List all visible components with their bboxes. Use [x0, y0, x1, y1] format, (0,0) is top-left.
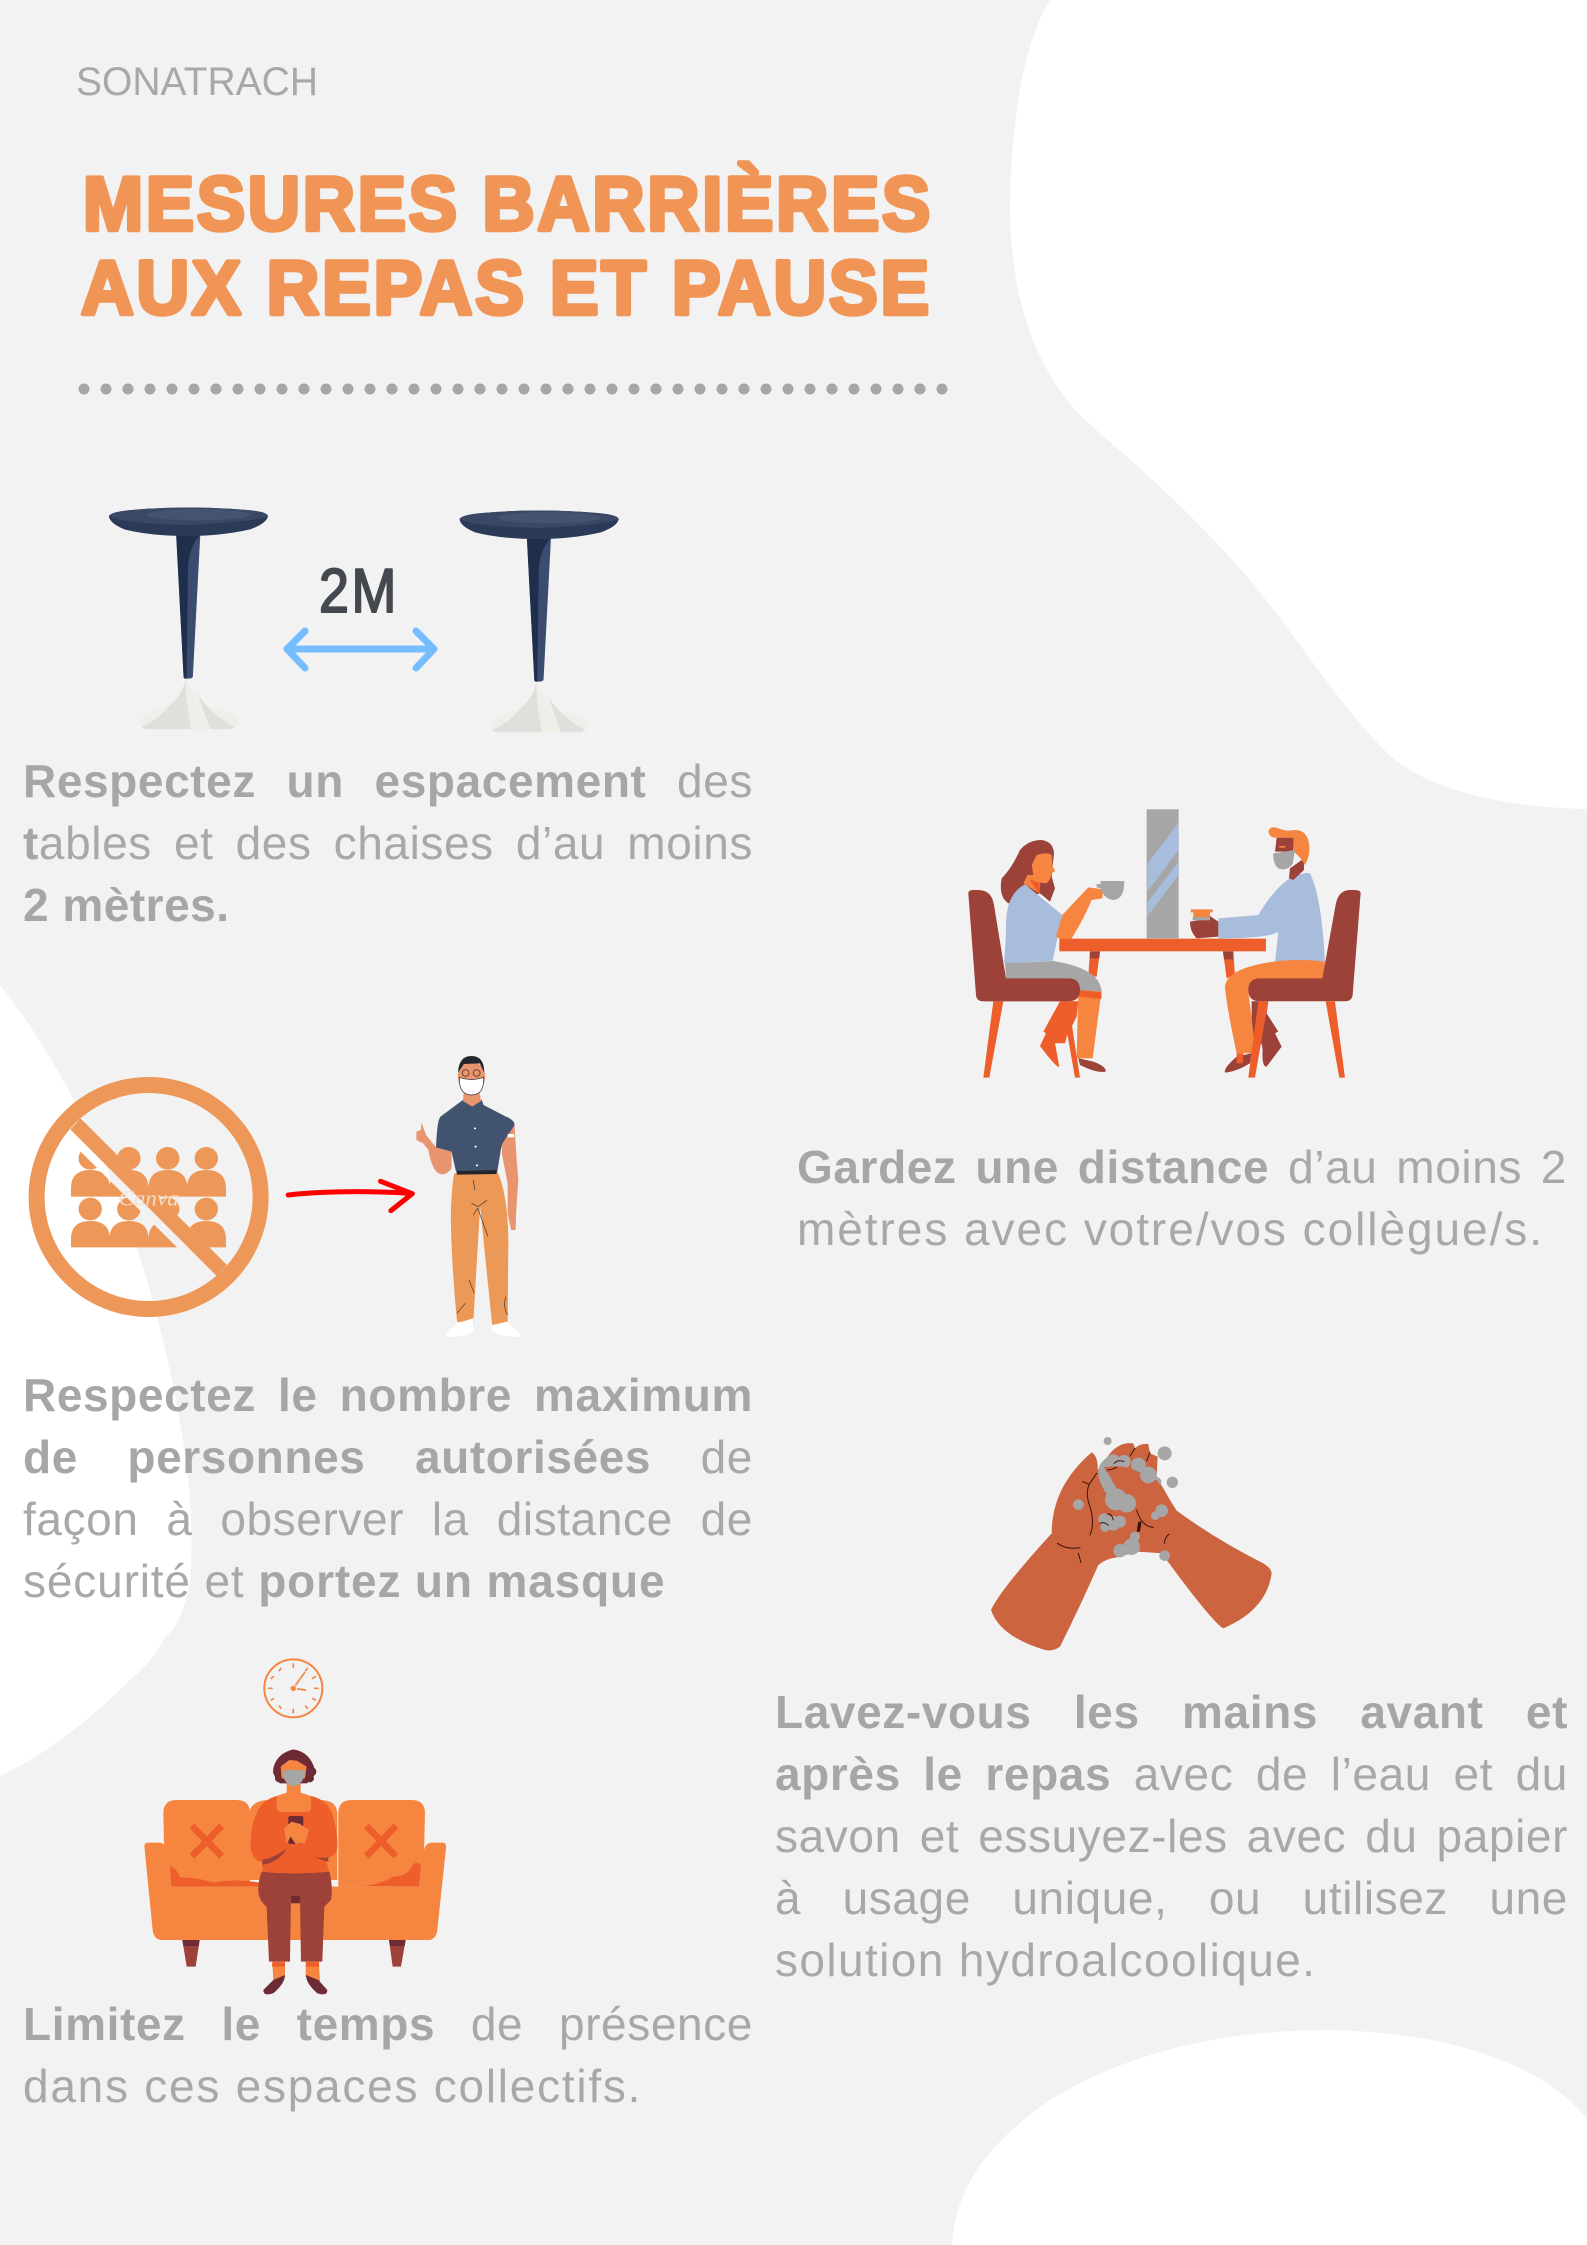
text block: maximum number of people: [23, 1369, 753, 1607]
upper hand fingers over foam: [1104, 1466, 1173, 1517]
illustration: two colleagues at a table with a screen: [968, 809, 1361, 1078]
text block: keep distance: mètres avec votre/vos collègue/s.: [797, 1203, 1544, 1255]
woman: [1001, 840, 1124, 1072]
illustration: sofa with woman seated: [144, 1749, 446, 1994]
distance label: 2M: [319, 557, 399, 626]
text block: wash hands: Lavez-vous les mains avant et: [775, 1686, 1568, 1738]
text block: maximum number of people: sécurité et portez un masque: [23, 1555, 665, 1607]
protective screen: [1147, 809, 1179, 938]
left chair back: [968, 890, 1068, 1001]
arrow: red hand-drawn arrow: [288, 1181, 412, 1211]
text block: keep distance: [797, 1141, 1567, 1255]
arms: [416, 1123, 518, 1230]
man: [1190, 827, 1325, 1073]
illustration: two tables two metres apart: [109, 507, 619, 732]
far table legs: [1088, 951, 1235, 978]
text block: wash hands: après le repas avec de l’eau et du: [775, 1748, 1568, 1800]
background blob: top right: [1010, 0, 1587, 809]
text block: limit time: dans ces espaces collectifs.: [23, 2060, 642, 2112]
illustration: man with mask, thumb up: [416, 1056, 522, 1337]
text block: wash hands: [775, 1686, 1568, 1986]
title: [81, 162, 933, 331]
shirt: [436, 1100, 515, 1172]
icon: wall clock: [264, 1659, 322, 1717]
text block: maximum number of people: façon à observer la distance de: [23, 1493, 753, 1545]
shoes: [446, 1318, 522, 1337]
title: MESURES BARRIÈRES: [83, 162, 933, 247]
hands: [991, 1443, 1272, 1650]
sofa base and arms: [144, 1843, 446, 1940]
trousers: [451, 1172, 508, 1325]
crowd of people: [71, 1147, 226, 1247]
background blob: left: [0, 985, 192, 1776]
text block: table spacing: 2 mètres.: [23, 879, 230, 931]
arrow: two metres double arrow: [287, 631, 434, 668]
organisation name: SONATRACH: [76, 60, 318, 104]
sofa legs: [182, 1940, 406, 1967]
left chair seat: [983, 978, 1080, 1001]
mask: [459, 1077, 484, 1095]
background blob: bottom right: [952, 2030, 1587, 2245]
neck and head: [463, 1090, 481, 1107]
icon: no crowd prohibition sign: [37, 1085, 261, 1309]
right chair legs: [1248, 1001, 1345, 1078]
left chair legs: [983, 1001, 1080, 1078]
text block: wash hands: savon et essuyez-les avec du papier: [775, 1810, 1568, 1862]
sofa back cushions: [250, 1800, 337, 1880]
right chair: [1248, 890, 1361, 1001]
text block: table spacing: Respectez un espacement des: [23, 755, 753, 807]
text block: maximum number of people: de personnes autorisées de: [23, 1431, 753, 1483]
seated woman: [251, 1749, 338, 1994]
watermark: Canva: [118, 1186, 179, 1211]
text block: table spacing: tables et des chaises d’au moins: [23, 817, 753, 869]
table top: [1059, 939, 1266, 951]
belt: [457, 1170, 497, 1175]
text block: wash hands: à usage unique, ou utilisez une: [775, 1872, 1568, 1924]
text block: limit time: Limitez le temps de présence: [23, 1998, 753, 2050]
text block: table spacing: [23, 755, 753, 931]
icon: left table: [109, 507, 268, 729]
text block: limit time: [23, 1998, 753, 2112]
text block: wash hands: solution hydroalcoolique.: [775, 1934, 1316, 1986]
soap foam: [1104, 1437, 1178, 1561]
soap lumps on skin: [1073, 1467, 1168, 1557]
skin creases: [1057, 1448, 1169, 1563]
seat forbidden marks: [192, 1826, 396, 1856]
prohibition slash: [70, 1118, 227, 1276]
text block: keep distance: Gardez une distance d’au moins 2: [797, 1141, 1567, 1193]
icon: right table: [460, 510, 619, 732]
text block: maximum number of people: Respectez le nombre maximum: [23, 1369, 753, 1421]
illustration: washing hands with soap: [991, 1437, 1272, 1650]
title: AUX REPAS ET PAUSE: [81, 246, 932, 331]
